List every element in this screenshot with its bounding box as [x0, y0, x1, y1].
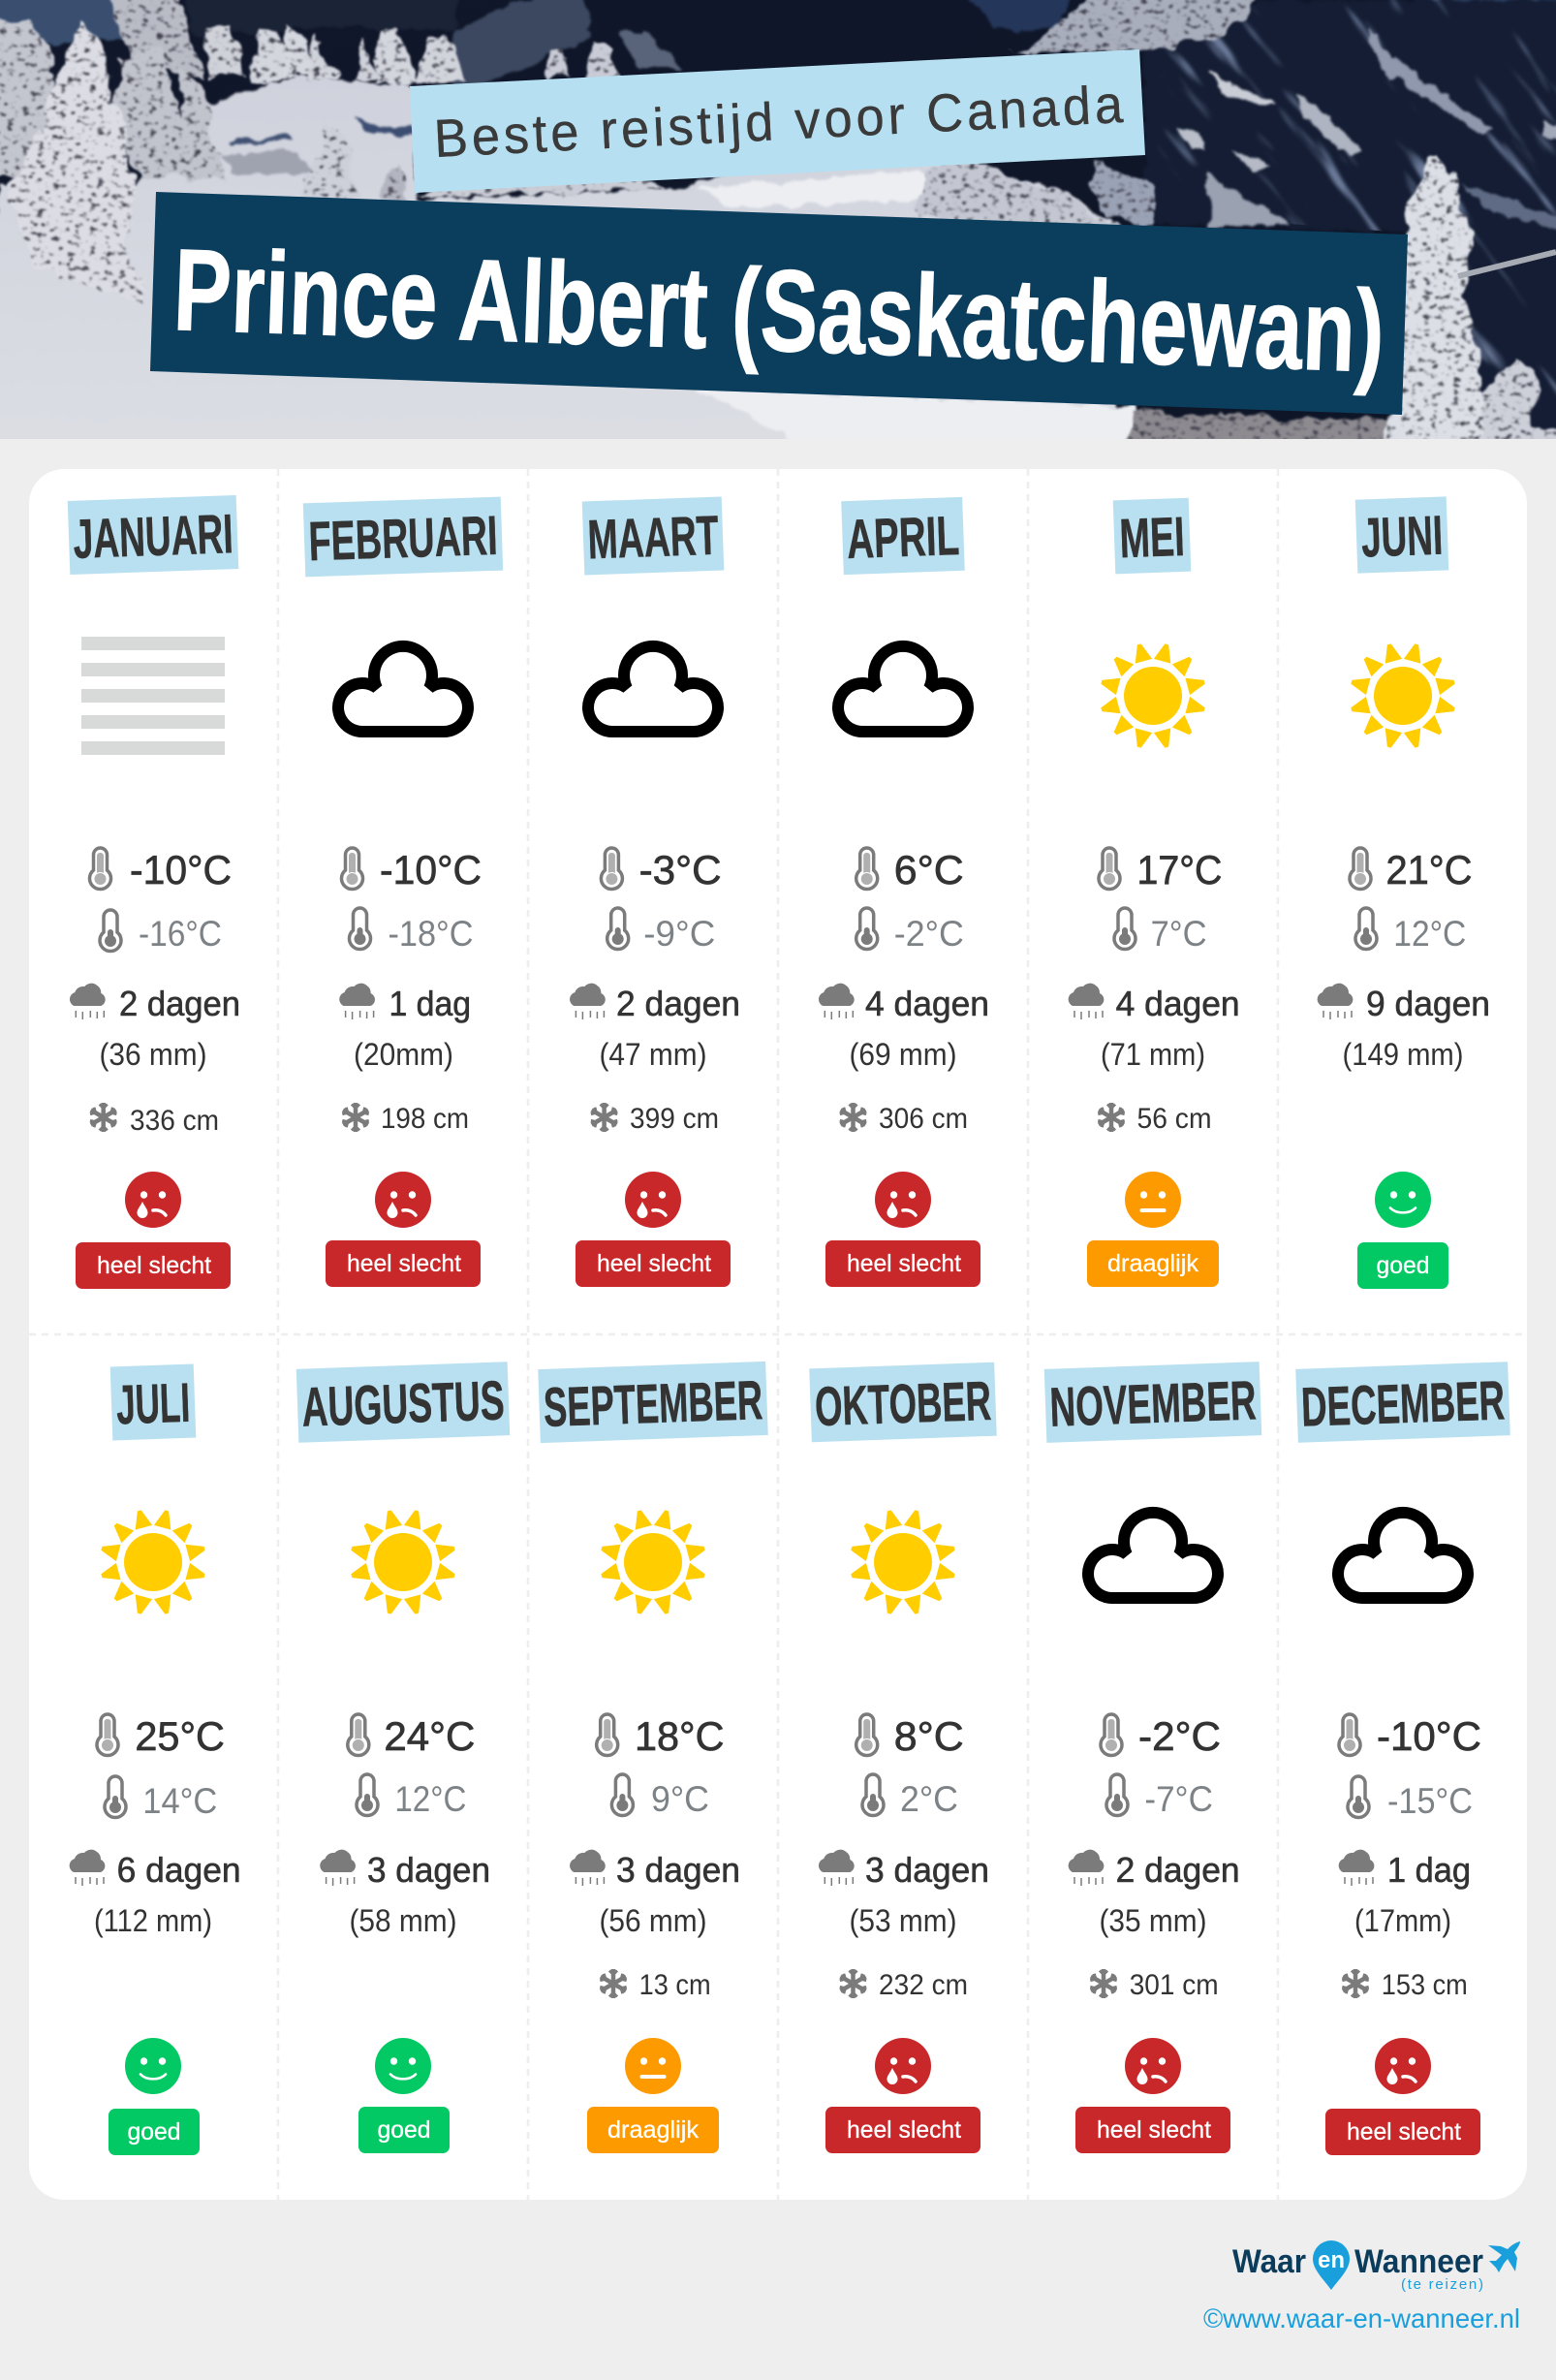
icon: thermometer high: [856, 1714, 878, 1755]
low temperature: 14°C: [142, 1781, 217, 1821]
rain amount: (36 mm): [99, 1037, 207, 1072]
icon: thermometer low: [1355, 908, 1377, 949]
subtitle text: Beste reistijd voor Canada: [433, 75, 1124, 169]
month label mei: MEI: [1118, 506, 1186, 570]
month label april: [841, 497, 965, 575]
icon: cloud: [1088, 1513, 1218, 1598]
rating badge: [587, 2107, 719, 2153]
panel: oktober: [809, 1362, 997, 2153]
rain amount: (47 mm): [599, 1037, 707, 1072]
icon: snow: [840, 1103, 866, 1132]
low temperature: -16°C: [139, 914, 222, 954]
month label januari: [68, 495, 238, 575]
rain amount: (69 mm): [849, 1037, 957, 1072]
icon: thermometer high: [341, 848, 362, 889]
month label april: APRIL: [846, 505, 960, 571]
high temperature: -10°C: [1377, 1713, 1481, 1759]
high temperature: 24°C: [384, 1713, 475, 1759]
title ribbon: [150, 192, 1408, 415]
icon: rain: [570, 984, 606, 1019]
icon: sun: [1350, 642, 1456, 749]
white card panel: [29, 469, 1527, 2200]
month label maart: MAART: [586, 505, 720, 571]
month label februari: [303, 497, 503, 577]
icon: rain: [819, 984, 855, 1019]
icon: thermometer low: [862, 1774, 884, 1815]
panel: mei: [1069, 498, 1240, 1287]
rating badge: draaglijk: [1107, 1250, 1198, 1277]
snow amount: 56 cm: [1137, 1103, 1211, 1135]
icon: thermometer low: [856, 908, 878, 949]
icon: snow: [840, 1969, 866, 1998]
rain days: 4 dagen: [1116, 984, 1240, 1023]
icon: thermometer low: [607, 908, 629, 949]
month label oktober: [809, 1362, 997, 1442]
rating badge: [1087, 1240, 1219, 1287]
rating badge: heel slecht: [847, 1250, 961, 1277]
panel: september: [538, 1362, 768, 2153]
low temperature: 9°C: [651, 1779, 709, 1819]
icon: thermometer low: [100, 910, 121, 951]
rating badge: heel slecht: [1347, 2118, 1461, 2145]
icon: sun: [1100, 642, 1206, 749]
rain days: 3 dagen: [616, 1850, 740, 1890]
icon: map pin: [1313, 2240, 1350, 2290]
icon: thermometer high: [97, 1714, 118, 1755]
icon: fog: [81, 637, 225, 755]
icon: thermometer low: [1114, 908, 1136, 949]
icon: snow: [1098, 1103, 1125, 1132]
icon: thermometer high: [601, 848, 622, 889]
rain amount: (35 mm): [1099, 1903, 1207, 1938]
low temperature: -15°C: [1387, 1781, 1473, 1821]
icon: cloud: [588, 646, 718, 732]
icon: sun: [100, 1509, 206, 1615]
panel: juni: [1318, 496, 1490, 1289]
high temperature: 18°C: [635, 1713, 725, 1759]
rating badge: heel slecht: [347, 1250, 461, 1277]
icon: thermometer low: [357, 1774, 378, 1815]
rating badge: [326, 1240, 481, 1287]
icon: thermometer high: [1350, 848, 1371, 889]
month label juni: [1355, 496, 1448, 574]
icon: thermometer low: [105, 1776, 126, 1817]
icon: sun: [350, 1509, 456, 1615]
rain amount: (112 mm): [94, 1903, 212, 1938]
high temperature: -2°C: [1138, 1713, 1221, 1759]
icon: thermometer low: [1348, 1776, 1369, 1817]
low temperature: 12°C: [394, 1779, 466, 1819]
panel: augustus: [296, 1362, 510, 2153]
month label februari: FEBRUARI: [308, 505, 499, 573]
month label november: [1044, 1362, 1261, 1443]
icon: rain: [1339, 1850, 1374, 1886]
panel: januari: [68, 495, 240, 1289]
rating badge: [109, 2109, 200, 2155]
snow amount: 336 cm: [130, 1105, 219, 1137]
low temperature: 12°C: [1393, 914, 1466, 954]
rating badge: [1075, 2107, 1230, 2153]
rating badge: [1357, 1242, 1448, 1289]
icon: rain: [1069, 1850, 1104, 1886]
icon: snow: [342, 1103, 369, 1132]
high temperature: 25°C: [135, 1713, 225, 1759]
high temperature: 8°C: [894, 1713, 964, 1759]
rating badge: goed: [378, 2116, 430, 2144]
icon: cloud: [1338, 1513, 1468, 1598]
icon: cloud: [338, 646, 468, 732]
icon: airplane: [1488, 2241, 1520, 2272]
rain days: 3 dagen: [367, 1850, 490, 1890]
icon: sun: [850, 1509, 956, 1615]
month label augustus: [296, 1362, 510, 1443]
snow amount: 13 cm: [639, 1969, 711, 2001]
rain days: 1 dag: [1387, 1850, 1471, 1890]
rain amount: (17mm): [1354, 1903, 1451, 1938]
icon: thermometer high: [1101, 1714, 1122, 1755]
icon: map pin: en: [1318, 2247, 1345, 2273]
snow amount: 399 cm: [630, 1103, 719, 1135]
rating badge: draaglijk: [607, 2116, 699, 2144]
subtitle ribbon: [410, 49, 1145, 193]
snow amount: 153 cm: [1382, 1969, 1468, 2001]
snow amount: 232 cm: [879, 1969, 968, 2001]
rating badge: heel slecht: [1097, 2116, 1211, 2144]
high temperature: -3°C: [639, 847, 722, 892]
icon: rain: [1069, 984, 1104, 1019]
high temperature: 17°C: [1137, 847, 1223, 892]
icon: thermometer low: [349, 908, 370, 949]
icon: thermometer high: [856, 848, 878, 889]
rain days: 2 dagen: [1116, 1850, 1240, 1890]
rain amount: (58 mm): [349, 1903, 457, 1938]
icon: rain: [1318, 984, 1353, 1019]
icon: sad face: [1125, 2038, 1181, 2094]
icon: sun: [600, 1509, 706, 1615]
rating badge: [358, 2107, 450, 2153]
icon: neutral face: [1125, 1172, 1181, 1228]
month label juli: JULI: [115, 1372, 191, 1436]
rating badge: heel slecht: [97, 1252, 211, 1279]
icon: sad face: [125, 1172, 181, 1228]
icon: snow: [1090, 1969, 1117, 1998]
rain amount: (149 mm): [1343, 1037, 1463, 1072]
panel: juli: [70, 1364, 241, 2155]
panel: december: [1295, 1362, 1510, 2155]
low temperature: -9°C: [643, 914, 715, 954]
snow amount: 301 cm: [1130, 1969, 1219, 2001]
icon: thermometer high: [348, 1714, 369, 1755]
icon: snow: [591, 1103, 617, 1132]
icon: thermometer high: [1099, 848, 1120, 889]
rating badge: [76, 1242, 231, 1289]
icon: sad face: [875, 1172, 931, 1228]
month label september: SEPTEMBER: [543, 1369, 763, 1439]
logo word Wanneer: Wanneer: [1354, 2243, 1483, 2280]
logo: Waar en Wanneer: [1232, 2240, 1520, 2293]
icon: neutral face: [625, 2038, 681, 2094]
icon: cloud: [838, 646, 968, 732]
panel: april: [819, 497, 989, 1287]
high temperature: -10°C: [130, 847, 232, 892]
rain amount: (71 mm): [1101, 1037, 1205, 1072]
rating badge: [1325, 2109, 1480, 2155]
rating badge: heel slecht: [847, 2116, 961, 2144]
icon: rain: [819, 1850, 855, 1886]
low temperature: 2°C: [900, 1779, 958, 1819]
icon: rain: [339, 984, 375, 1019]
month label januari: JANUARI: [73, 503, 234, 571]
rain days: 6 dagen: [117, 1850, 241, 1890]
rating badge: heel slecht: [597, 1250, 711, 1277]
rain days: 2 dagen: [119, 984, 240, 1023]
rain days: 2 dagen: [616, 984, 740, 1023]
icon: sad face: [1375, 2038, 1431, 2094]
low temperature: -7°C: [1144, 1779, 1213, 1819]
icon: sad face: [625, 1172, 681, 1228]
icon: happy face: [1375, 1172, 1431, 1228]
logo tagline: (te reizen): [1401, 2276, 1483, 2293]
rating badge: [576, 1240, 731, 1287]
icon: snow: [1342, 1969, 1369, 1998]
icon: sad face: [875, 2038, 931, 2094]
icon: rain: [320, 1850, 356, 1886]
icon: happy face: [375, 2038, 431, 2094]
snow amount: 198 cm: [381, 1103, 469, 1135]
icon: thermometer high: [597, 1714, 618, 1755]
high temperature: -10°C: [380, 847, 482, 892]
rating badge: goed: [128, 2118, 180, 2145]
low temperature: 7°C: [1151, 914, 1207, 954]
rain amount: (56 mm): [599, 1903, 707, 1938]
website credit: ©www.waar-en-wanneer.nl: [1203, 2303, 1520, 2333]
icon: thermometer low: [1106, 1774, 1128, 1815]
snow amount: 306 cm: [879, 1103, 968, 1135]
low temperature: -2°C: [894, 914, 964, 954]
month label september: [538, 1362, 768, 1443]
rating badge: [825, 2107, 980, 2153]
panel: maart: [570, 497, 740, 1287]
high temperature: 21°C: [1385, 847, 1473, 892]
header photo: snowy mountain landscape: [0, 0, 1556, 439]
panel: februari: [303, 497, 503, 1287]
logo word Waar: Waar: [1232, 2243, 1306, 2280]
icon: snow: [90, 1103, 116, 1132]
rating badge: [825, 1240, 980, 1287]
low temperature: -18°C: [388, 914, 473, 954]
icon: rain: [570, 1850, 606, 1886]
icon: rain: [70, 1850, 105, 1886]
icon: snow: [600, 1969, 627, 1998]
high temperature: 6°C: [894, 847, 964, 892]
rain days: 9 dagen: [1366, 984, 1490, 1023]
rain amount: (20mm): [354, 1037, 453, 1072]
icon: thermometer high: [89, 848, 110, 889]
rain days: 3 dagen: [865, 1850, 989, 1890]
icon: thermometer high: [1339, 1714, 1360, 1755]
month label mei: [1113, 498, 1191, 574]
rain amount: (53 mm): [849, 1903, 957, 1938]
icon: thermometer low: [611, 1774, 633, 1815]
icon: happy face: [125, 2038, 181, 2094]
month label juni: JUNI: [1360, 505, 1444, 569]
rain days: 4 dagen: [865, 984, 989, 1023]
month label maart: [582, 497, 724, 575]
icon: sad face: [375, 1172, 431, 1228]
rating badge: goed: [1376, 1252, 1430, 1279]
panel: november: [1044, 1362, 1261, 2153]
month label november: NOVEMBER: [1049, 1369, 1258, 1439]
month label augustus: AUGUSTUS: [301, 1369, 506, 1439]
icon: rain: [70, 984, 106, 1019]
rain days: 1 dag: [389, 984, 471, 1023]
month label oktober: OKTOBER: [814, 1370, 992, 1438]
month label juli: [110, 1364, 196, 1440]
